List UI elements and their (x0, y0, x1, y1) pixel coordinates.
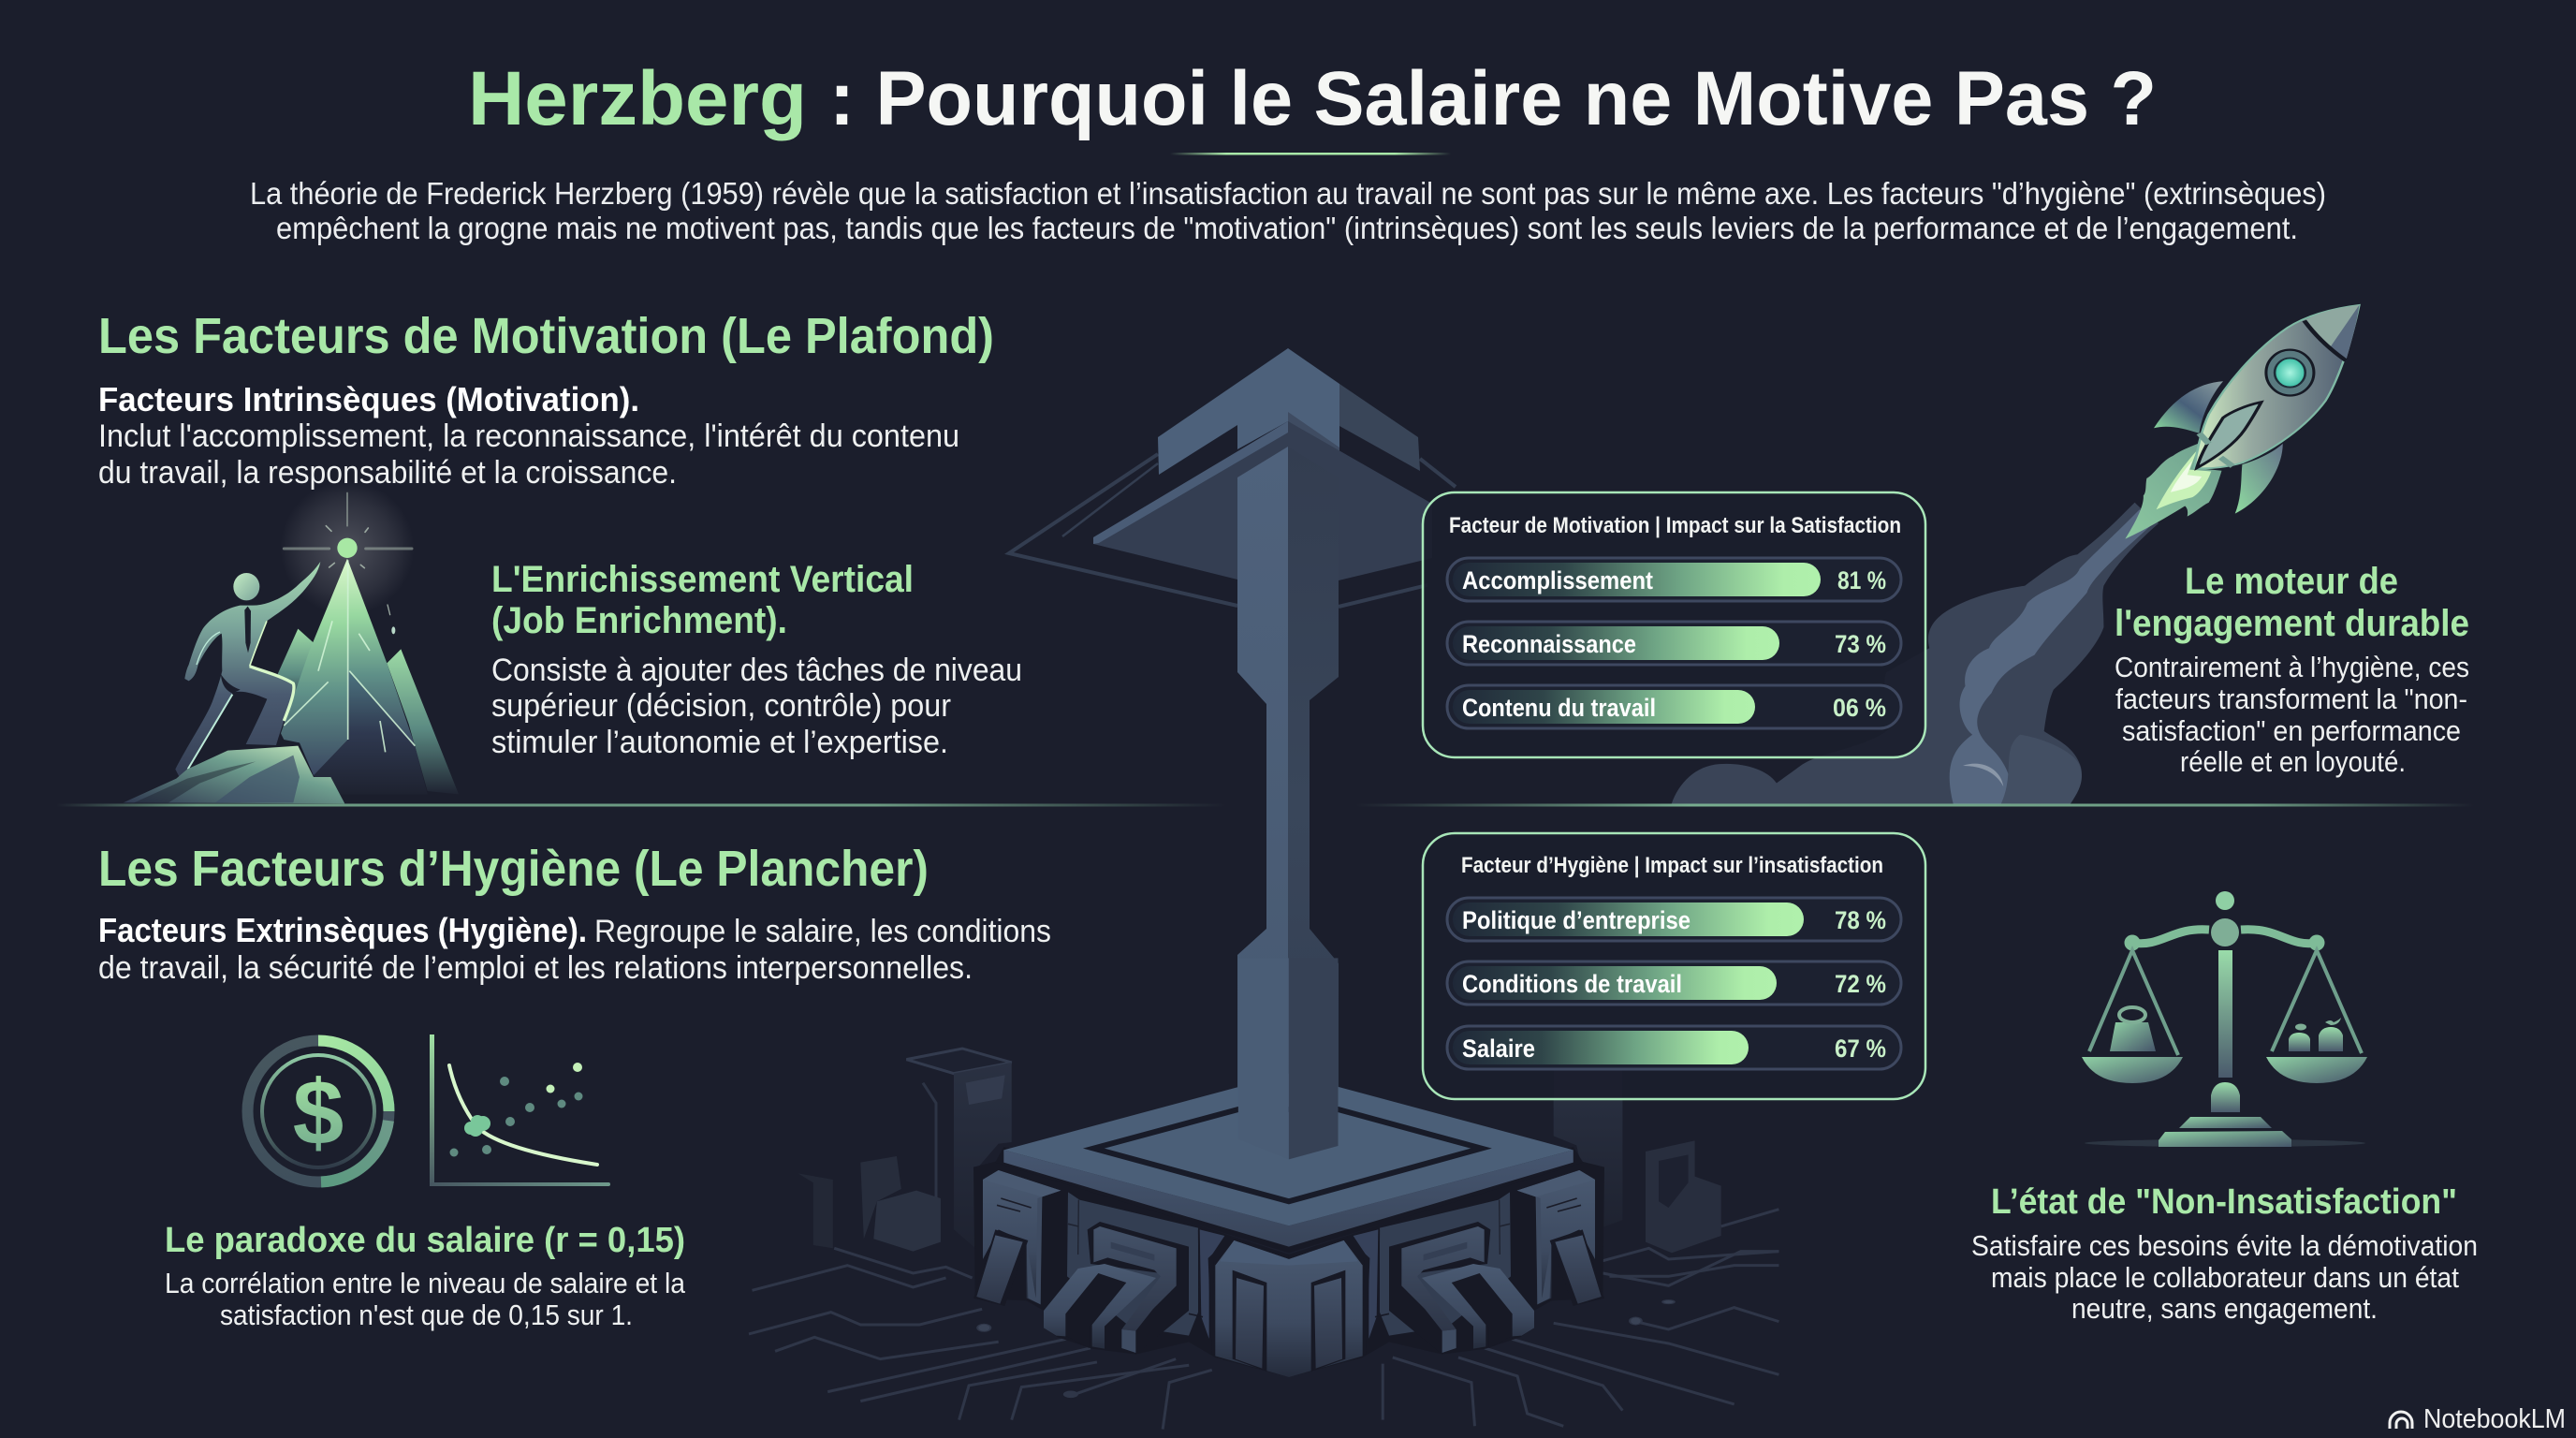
intro text: La théorie de Frederick Herzberg (1959) révèle que la satisfaction et l’insatisfaction au travail ne sont pas sur le même axe. Les facteurs "d’hygiène" (extrinsèques) (250, 176, 2326, 211)
text: salary paradox: satisfaction n'est que de 0,15 sur 1. (220, 1299, 633, 1331)
bar: conditions de travail: Conditions de travail (1462, 970, 1682, 998)
intro text (250, 176, 2326, 245)
bar: contenu du travail (1447, 685, 1901, 728)
background: city and circuit traces (749, 1049, 1778, 1430)
icon: salary dollar ring (247, 1041, 389, 1181)
base: left half (973, 1161, 1289, 1377)
bar: salaire: Salaire (1462, 1034, 1535, 1063)
panel: hygiene bar chart: Facteur d’Hygiène | Impact sur l’insatisfaction (1461, 853, 1883, 878)
watermark: NotebookLM: NotebookLM (2423, 1404, 2566, 1434)
text: job enrichment: (Job Enrichment). (491, 600, 787, 641)
icon: balance scale (2082, 891, 2367, 1147)
text: job enrichment: Consiste à ajouter des tâches de niveau (491, 653, 1022, 688)
text: intrinsic factors (98, 380, 959, 491)
text: job enrichment: stimuler l’autonomie et l’expertise. (491, 725, 948, 760)
icon: salary dollar ring: $ (293, 1061, 344, 1164)
bar: conditions de travail: 72 % (1835, 970, 1886, 998)
text: salary paradox: La corrélation entre le niveau de salaire et la (165, 1267, 686, 1299)
divider: left (56, 803, 1226, 807)
divider: right (1355, 803, 2474, 807)
bar: contenu du travail: Contenu du travail (1462, 694, 1656, 722)
illustration: central pillar (1009, 348, 1456, 1161)
bar: reconnaissance: 73 % (1835, 630, 1886, 658)
base: plate and column foot (995, 958, 1583, 1253)
heading: hygiene: Les Facteurs d’Hygiène (Le Plancher) (98, 841, 929, 897)
heading: motivation: Les Facteurs de Motivation (Le Plafond) (98, 308, 994, 364)
bar: accomplissement: Accomplissement (1462, 566, 1653, 594)
text: extrinsic factors: de travail, la sécurité de l’emploi et les relations interpersonnelles. (98, 950, 973, 986)
illustration: smoke trail (1672, 503, 2159, 804)
title underline (1170, 153, 1451, 155)
bar: reconnaissance (1447, 622, 1901, 665)
text: intrinsic factors: Facteurs Intrinsèques (Motivation). (98, 380, 639, 418)
bar: conditions de travail (1447, 961, 1901, 1005)
text: lasting engagement: l'engagement durable (2115, 603, 2469, 644)
text: non-dissatisfaction: Satisfaire ces besoins évite la démotivation (1971, 1229, 2478, 1262)
text: non-dissatisfaction (1971, 1182, 2478, 1325)
base: right half (1289, 1161, 1604, 1377)
chart: salary versus satisfaction scatter (430, 1034, 610, 1186)
text: extrinsic factors: Facteurs Extrinsèques (Hygiène). (98, 911, 587, 949)
icon: climber reaching star on mountain (124, 481, 459, 803)
bar: politique d'entreprise: Politique d’entreprise (1462, 906, 1690, 934)
text: extrinsic factors (98, 911, 1051, 986)
panel: motivation bar chart: Facteur de Motivation | Impact sur la Satisfaction (1449, 513, 1901, 538)
text: intrinsic factors: Inclut l'accomplissement, la reconnaissance, l'intérêt du contenu (98, 418, 959, 454)
bar: contenu du travail: 06 % (1833, 694, 1886, 722)
text: lasting engagement: facteurs transforment la "non- (2115, 682, 2467, 715)
panel: motivation bar chart (1423, 492, 1925, 757)
bar: reconnaissance: Reconnaissance (1462, 630, 1636, 658)
text: job enrichment: supérieur (décision, contrôle) pour (491, 688, 951, 724)
bar: politique d'entreprise (1447, 898, 1901, 941)
pillar column (1237, 447, 1339, 1161)
icon: rocket (2125, 305, 2359, 539)
pillar top outline (1009, 454, 1456, 607)
text: lasting engagement: Le moteur de (2185, 561, 2398, 602)
illustration: isometric base (973, 958, 1604, 1377)
text: salary paradox: Le paradoxe du salaire (r = 0,15) (165, 1221, 685, 1260)
text: lasting engagement: réelle et en loyouté. (2180, 745, 2406, 778)
panel: hygiene bar chart (1423, 833, 1925, 1099)
text: extrinsic factors: Regroupe le salaire, les conditions (594, 914, 1051, 949)
text: job enrichment (491, 559, 1022, 760)
bar: accomplissement: 81 % (1837, 566, 1886, 594)
text: intrinsic factors: du travail, la responsabilité et la croissance. (98, 455, 677, 491)
bar: salaire: 67 % (1835, 1034, 1886, 1063)
text: lasting engagement: Contrairement à l’hygiène, ces (2115, 651, 2469, 683)
text: non-dissatisfaction: L’état de "Non-Insatisfaction" (1991, 1182, 2457, 1222)
text: job enrichment: L'Enrichissement Vertical (491, 559, 914, 600)
bar: salaire (1447, 1026, 1901, 1069)
text: salary paradox (165, 1221, 686, 1331)
pillar cap (1093, 348, 1432, 580)
text: lasting engagement: satisfaction" en performance (2122, 714, 2461, 747)
bar: politique d'entreprise: 78 % (1835, 906, 1886, 934)
intro text: empêchent la grogne mais ne motivent pas, tandis que les facteurs de "motivation" (intrinsèques) sont les seuls leviers de la performance et de l’engagement. (276, 211, 2298, 245)
title: Herzberg (468, 56, 807, 141)
bar: accomplissement (1447, 558, 1901, 601)
text: non-dissatisfaction: neutre, sans engagement. (2071, 1292, 2378, 1325)
text: lasting engagement (2115, 561, 2469, 778)
text: non-dissatisfaction: mais place le collaborateur dans un état (1991, 1261, 2459, 1294)
title: : Pourquoi le Salaire ne Motive Pas ? (829, 56, 2157, 141)
